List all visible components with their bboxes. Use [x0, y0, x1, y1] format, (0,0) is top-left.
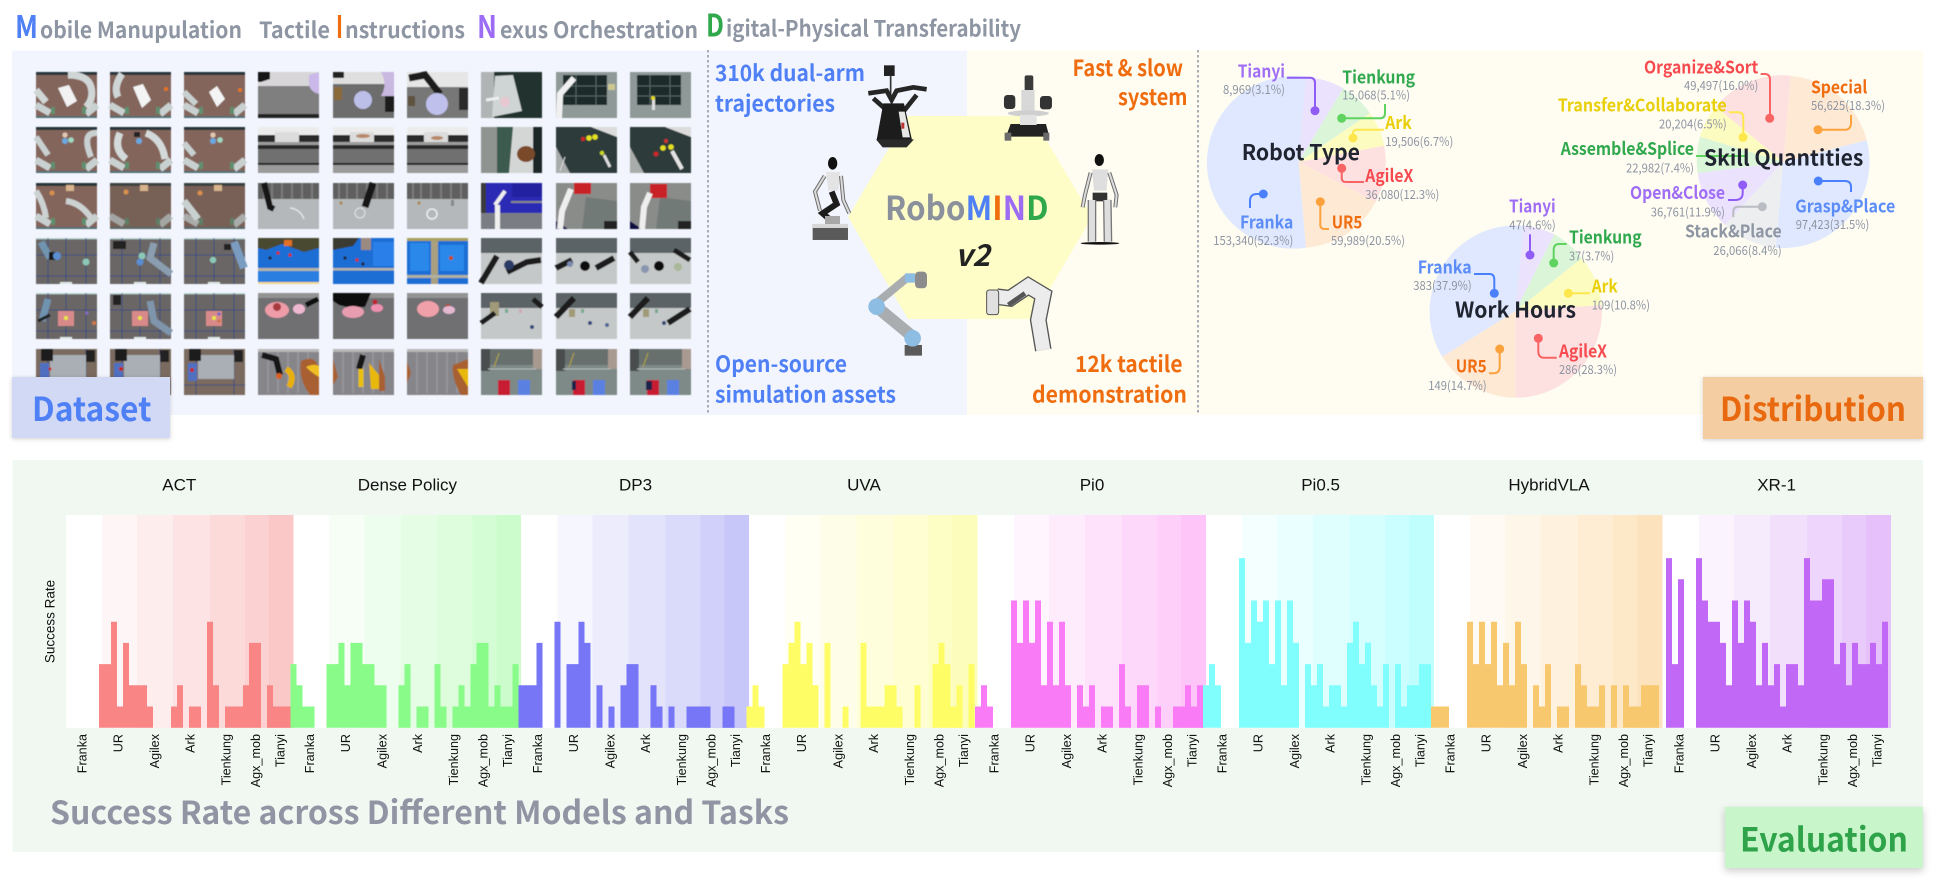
pie title: Skill Quantities: [1704, 142, 1863, 173]
model UVA: Franka: [759, 734, 773, 773]
thumb r3c9: [630, 183, 691, 229]
model DP3: DP3: [619, 476, 652, 494]
title: MIND acronym heading: nstructions: [345, 13, 465, 45]
thumb r1c1: [36, 72, 97, 118]
thumb r5c3: [184, 293, 245, 339]
model XR-1: Tianyi: [1870, 734, 1884, 767]
pie title: Work Hours: [1455, 294, 1576, 325]
title: MIND acronym heading: igital-Physical Transferability: [726, 12, 1021, 44]
model XR-1: Franka: [1672, 734, 1686, 773]
labels: Ark: [1591, 274, 1618, 299]
thumb r5c1: [36, 293, 97, 339]
labels: 97,423(31.5%): [1796, 214, 1869, 233]
thumb r2c9: [630, 127, 691, 173]
labels: 19,506(6.7%): [1385, 131, 1453, 150]
thumb r4c6: [407, 238, 468, 284]
thumb r2c2: [110, 127, 171, 173]
model Pi0: [975, 476, 1206, 787]
panel: distribution: [967, 50, 1923, 415]
model ACT: ACT: [162, 476, 196, 494]
thumb r6c2: [110, 349, 171, 395]
feature text: blue left: 310k dual-arm: [715, 56, 865, 88]
icon: tower robot: [1004, 75, 1052, 141]
model HybridVLA: Ark: [1552, 733, 1566, 753]
model HybridVLA: Franka: [1444, 734, 1458, 773]
thumb r5c6: [407, 293, 468, 339]
model Dense Policy: Agx_mob: [476, 734, 490, 787]
labels: 36,761(11.9%): [1651, 201, 1725, 220]
robots: [813, 65, 1119, 356]
thumb r2c7: [481, 127, 542, 173]
labels: 109(10.8%): [1592, 294, 1650, 313]
thumb r2c3: [184, 127, 245, 173]
labels: [1213, 59, 1453, 249]
labels: 20,204(6.5%): [1659, 114, 1727, 133]
model XR-1: Agilex: [1745, 733, 1759, 768]
thumb r4c3: [184, 238, 245, 284]
model Pi0: Agilex: [1060, 733, 1074, 768]
leader lines: [1696, 74, 1851, 217]
thumb r1c2: [110, 72, 171, 118]
labels: Grasp&Place: [1795, 193, 1895, 218]
model Pi0.5: Ark: [1324, 733, 1338, 753]
model HybridVLA: UR: [1480, 734, 1494, 752]
model Pi0.5: Franka: [1216, 734, 1230, 773]
labels: 153,340(52.3%): [1213, 230, 1293, 249]
model UVA: Tianyi: [957, 734, 971, 767]
model XR-1: Agx_mob: [1846, 734, 1860, 787]
labels: AgileX: [1558, 338, 1607, 363]
thumb r4c7: [481, 238, 542, 284]
labels: 36,080(12.3%): [1365, 184, 1439, 203]
thumbnail grid: [36, 72, 691, 395]
model Pi0.5: Pi0.5: [1301, 476, 1340, 494]
model Pi0.5: Agilex: [1288, 733, 1302, 768]
thumb r3c5: [333, 183, 394, 229]
model XR-1: [1666, 476, 1891, 787]
central title: [885, 182, 1048, 275]
icon: Franka arm: [987, 286, 1043, 350]
model Pi0: Tienkung: [1132, 734, 1146, 785]
labels: Tienkung: [1342, 64, 1415, 89]
labels: [1413, 194, 1650, 394]
model Pi0.5: Tienkung: [1360, 734, 1374, 785]
bar chart: success rate: [42, 476, 1891, 787]
model XR-1: Ark: [1780, 733, 1794, 753]
model DP3: Tienkung: [675, 734, 689, 785]
feature text: orange right: [1032, 51, 1188, 410]
thumb r2c1: [36, 127, 97, 173]
thumb r4c9: [630, 238, 691, 284]
model Dense Policy: [290, 476, 521, 787]
model UVA: [746, 476, 978, 787]
model UVA: Tienkung: [903, 734, 917, 785]
model Dense Policy: Dense Policy: [358, 476, 458, 494]
model Dense Policy: Franka: [303, 734, 317, 773]
central title: RoboMIND: [885, 182, 1048, 230]
labels: 286(28.3%): [1559, 359, 1617, 378]
label: Dataset: Dataset: [32, 383, 152, 431]
panel: dataset: [12, 50, 967, 415]
thumb r4c8: [556, 238, 617, 284]
labels: Open&Close: [1630, 180, 1725, 205]
feature text: blue left: Open-source: [715, 347, 847, 379]
label: Evaluation: Evaluation: [1740, 814, 1908, 862]
label: Distribution: Distribution: [1720, 383, 1906, 431]
model HybridVLA: Tienkung: [1588, 734, 1602, 785]
labels: UR5: [1332, 209, 1362, 234]
labels: Tianyi: [1238, 59, 1285, 84]
model DP3: Agilex: [604, 733, 618, 768]
model ACT: Franka: [76, 734, 90, 773]
model ACT: Ark: [184, 733, 198, 753]
thumb r3c3: [184, 183, 245, 229]
thumb r5c7: [481, 293, 542, 339]
labels: Ark: [1384, 110, 1412, 135]
thumb r4c4: [258, 238, 319, 284]
model DP3: Agx_mob: [704, 734, 718, 787]
labels: 383(37.9%): [1413, 275, 1472, 294]
model DP3: Franka: [531, 734, 545, 773]
icon: dual-arm mobile robot: [868, 65, 927, 147]
model HybridVLA: HybridVLA: [1508, 476, 1590, 494]
labels: 22,982(7.4%): [1626, 157, 1694, 176]
feature text: orange right: Fast & slow: [1072, 51, 1183, 83]
label: Distribution: [1703, 377, 1923, 439]
model ACT: UR: [112, 734, 126, 752]
model XR-1: Tienkung: [1816, 734, 1830, 785]
thumb r3c8: [556, 183, 617, 229]
labels: Franka: [1418, 254, 1472, 279]
title: MIND acronym heading: exus Orchestration: [500, 13, 698, 45]
leader lines: [1474, 234, 1590, 373]
label: Evaluation: [1725, 807, 1923, 868]
model Dense Policy: UR: [339, 734, 353, 752]
model DP3: UR: [567, 734, 581, 752]
thumb r6c8: [556, 349, 617, 395]
model Pi0: Pi0: [1080, 476, 1104, 494]
model HybridVLA: Agilex: [1516, 733, 1530, 768]
labels: 15,068(5.1%): [1342, 84, 1410, 103]
icon: UR arm: [868, 272, 927, 356]
model ACT: Agx_mob: [249, 734, 263, 787]
model UVA: Ark: [867, 733, 881, 753]
model ACT: Agilex: [148, 733, 162, 768]
thumb r6c7: [481, 349, 542, 395]
icon: standing humanoid: [1081, 154, 1119, 245]
model ACT: Tianyi: [274, 734, 288, 767]
title: MIND acronym heading: Tactile: [259, 13, 330, 45]
labels: 37(3.7%): [1569, 245, 1614, 264]
model HybridVLA: Agx_mob: [1617, 734, 1631, 787]
labels: Transfer&Collaborate: [1558, 93, 1727, 118]
thumb r5c5: [333, 293, 394, 339]
labels: Special: [1811, 74, 1868, 99]
thumb r3c2: [110, 183, 171, 229]
thumb r6c3: [184, 349, 245, 395]
labels: Assemble&Splice: [1560, 136, 1694, 161]
model DP3: Ark: [639, 733, 653, 753]
model DP3: [518, 476, 749, 787]
labels: 26,066(8.4%): [1713, 240, 1782, 259]
thumb r3c7: [481, 183, 542, 229]
y axis title: Success Rate: [42, 580, 58, 663]
labels: Tianyi: [1509, 194, 1556, 219]
thumb r3c1: [36, 183, 97, 229]
thumb r3c4: [258, 183, 319, 229]
title: MIND acronym heading: [15, 0, 1021, 47]
model Dense Policy: Tianyi: [501, 734, 515, 767]
labels: AgileX: [1364, 163, 1413, 188]
hexagon: [848, 116, 1092, 319]
model UVA: UVA: [847, 476, 882, 494]
model ACT: Tienkung: [220, 734, 234, 785]
model Pi0: UR: [1024, 734, 1038, 752]
model Pi0.5: Tianyi: [1414, 734, 1428, 767]
model HybridVLA: Tianyi: [1642, 734, 1656, 767]
thumb r4c2: [110, 238, 171, 284]
labels: 56,625(18.3%): [1811, 95, 1885, 114]
feature text: blue left: [715, 56, 896, 410]
thumb r1c7: [481, 72, 542, 118]
thumb r1c6: [407, 72, 468, 118]
title: MIND acronym heading: D: [706, 0, 724, 46]
model Pi0.5: Agx_mob: [1389, 734, 1403, 787]
icon: humanoid on base: [813, 157, 849, 240]
model ACT: [76, 476, 294, 787]
thumb r5c8: [556, 293, 617, 339]
labels: Organize&Sort: [1644, 54, 1759, 79]
labels: [1558, 54, 1895, 259]
central title: v2: [955, 231, 992, 275]
model Pi0.5: [1203, 476, 1434, 787]
thumb r2c6: [407, 127, 468, 173]
thumb r2c4: [258, 127, 319, 173]
feature text: orange right: demonstration: [1032, 378, 1187, 410]
model Pi0: Agx_mob: [1161, 734, 1175, 787]
model XR-1: UR: [1708, 734, 1722, 752]
model UVA: Agilex: [832, 733, 846, 768]
labels: 49,497(16.0%): [1684, 75, 1758, 94]
model HybridVLA: [1431, 476, 1662, 787]
feature text: blue left: trajectories: [715, 86, 835, 118]
model Dense Policy: Tienkung: [447, 734, 461, 785]
thumb r1c9: [630, 72, 691, 118]
model XR-1: XR-1: [1757, 476, 1796, 494]
labels: 8,969(3.1%): [1223, 79, 1285, 98]
thumb r6c9: [630, 349, 691, 395]
labels: UR5: [1456, 354, 1487, 379]
model UVA: Agx_mob: [932, 734, 946, 787]
labels: Stack&Place: [1685, 219, 1782, 244]
model Dense Policy: Agilex: [376, 733, 390, 768]
thumb r6c4: [258, 349, 319, 395]
thumb r1c5: [333, 72, 394, 118]
model UVA: UR: [795, 734, 809, 752]
thumb r1c8: [556, 72, 617, 118]
feature text: blue left: simulation assets: [715, 378, 896, 410]
title: MIND acronym heading: M: [15, 2, 38, 47]
label: Dataset: [12, 377, 170, 438]
model Pi0.5: UR: [1252, 734, 1266, 752]
pie: Robot Type: [1207, 59, 1453, 249]
title: MIND acronym heading: I: [336, 2, 343, 47]
thumb r4c1: [36, 238, 97, 284]
labels: 47(4.6%): [1509, 214, 1556, 233]
chart caption: Success Rate across Different Models and Tasks: [50, 788, 789, 834]
thumb r6c1: [36, 349, 97, 395]
thumb r2c8: [556, 127, 617, 173]
thumb r5c9: [630, 293, 691, 339]
thumb r5c4: [258, 293, 319, 339]
pie: Skill Quantities: [1558, 54, 1895, 259]
thumb r1c3: [184, 72, 245, 118]
model Dense Policy: Ark: [411, 733, 425, 753]
title: MIND acronym heading: N: [477, 2, 497, 47]
thumb r6c6: [407, 349, 468, 395]
model Pi0: Tianyi: [1186, 734, 1200, 767]
thumb r1c4: [258, 72, 319, 118]
panel: evaluation: [12, 460, 1923, 852]
model DP3: Tianyi: [729, 734, 743, 767]
thumb r4c5: [333, 238, 394, 284]
labels: Franka: [1240, 209, 1293, 234]
feature text: orange right: 12k tactile: [1075, 347, 1182, 379]
pie: Work Hours: [1413, 194, 1650, 398]
thumb r6c5: [333, 349, 394, 395]
model Pi0: Ark: [1096, 733, 1110, 753]
thumb r3c6: [407, 183, 468, 229]
labels: 59,989(20.5%): [1331, 230, 1405, 249]
leader lines: [1250, 78, 1385, 229]
labels: 149(14.7%): [1428, 375, 1487, 394]
thumb r5c2: [110, 293, 171, 339]
pie title: Robot Type: [1242, 136, 1360, 167]
feature text: orange right: system: [1118, 80, 1188, 112]
thumb r2c5: [333, 127, 394, 173]
labels: Tienkung: [1569, 225, 1642, 250]
model Pi0: Franka: [988, 734, 1002, 773]
title: MIND acronym heading: obile Manupulation: [40, 13, 242, 45]
